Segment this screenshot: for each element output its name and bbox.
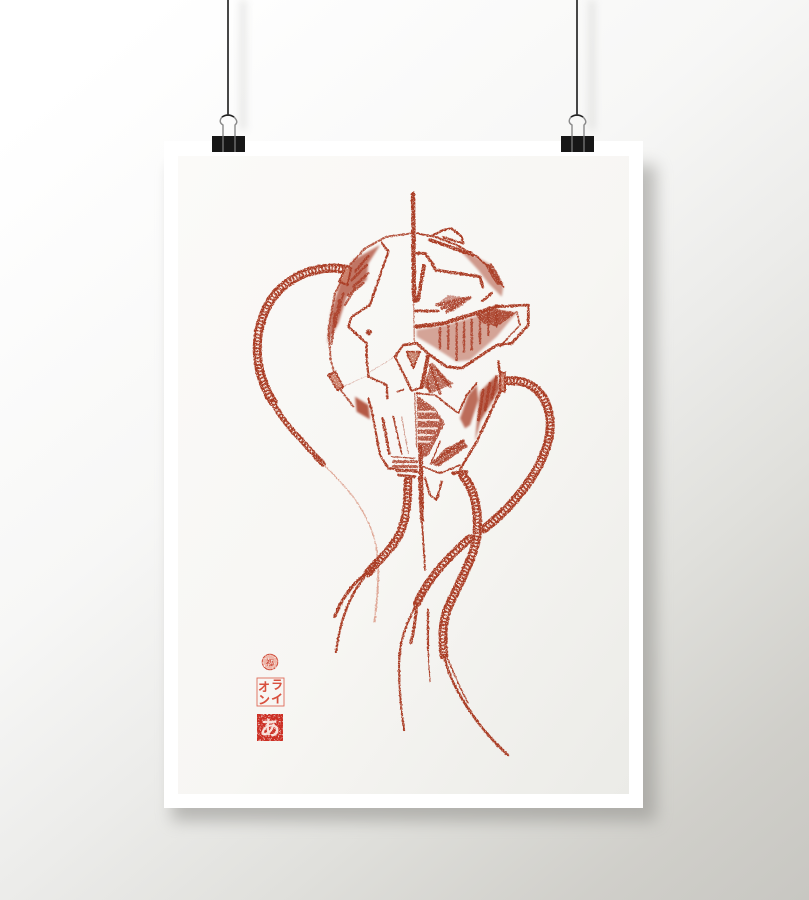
rectangular name seal: ン bbox=[258, 693, 270, 707]
nose side shade bbox=[423, 362, 453, 393]
visor bbox=[417, 307, 497, 327]
center line bbox=[413, 194, 414, 297]
head drawing bbox=[328, 194, 528, 508]
icon: right binder clip bbox=[561, 0, 594, 152]
icon: left binder clip bbox=[212, 0, 245, 152]
teeth bbox=[383, 418, 389, 453]
poster paper bbox=[178, 156, 629, 794]
dark top-right corner bbox=[485, 263, 503, 285]
short vertical strokes bbox=[420, 478, 430, 682]
ear bolts bbox=[328, 372, 343, 390]
center-left cable bbox=[335, 480, 408, 652]
poster frame bbox=[164, 141, 643, 808]
lower jaw shade bbox=[432, 440, 467, 467]
square red seal: あ bbox=[260, 717, 280, 740]
right mask plate bbox=[417, 253, 483, 287]
rectangular name seal: イ bbox=[271, 692, 283, 706]
rectangular name seal bbox=[257, 678, 284, 707]
dark visor corner bbox=[473, 309, 517, 327]
left mask plate bbox=[348, 243, 388, 398]
jaw shade with bars bbox=[417, 395, 445, 460]
small upper shade bbox=[437, 295, 472, 312]
rectangular name seal: ラ bbox=[271, 678, 283, 692]
skull outline bbox=[328, 233, 412, 407]
chin bbox=[425, 478, 442, 500]
square red seal bbox=[257, 714, 283, 741]
rectangular name seal: オ bbox=[258, 680, 270, 694]
top vents bbox=[430, 240, 473, 255]
soft smudged shading bbox=[327, 245, 517, 442]
right cable bbox=[399, 381, 550, 730]
round seal bbox=[262, 654, 278, 670]
round seal: 福 bbox=[266, 658, 274, 668]
center-right long cable bbox=[443, 476, 508, 755]
head hatching bbox=[332, 256, 497, 471]
wire shadows bbox=[243, 0, 592, 130]
nose bbox=[395, 345, 423, 391]
left cable bbox=[257, 268, 379, 622]
poster shadow bbox=[172, 165, 656, 821]
illustration: red chalk mechanical skull bbox=[257, 194, 550, 755]
